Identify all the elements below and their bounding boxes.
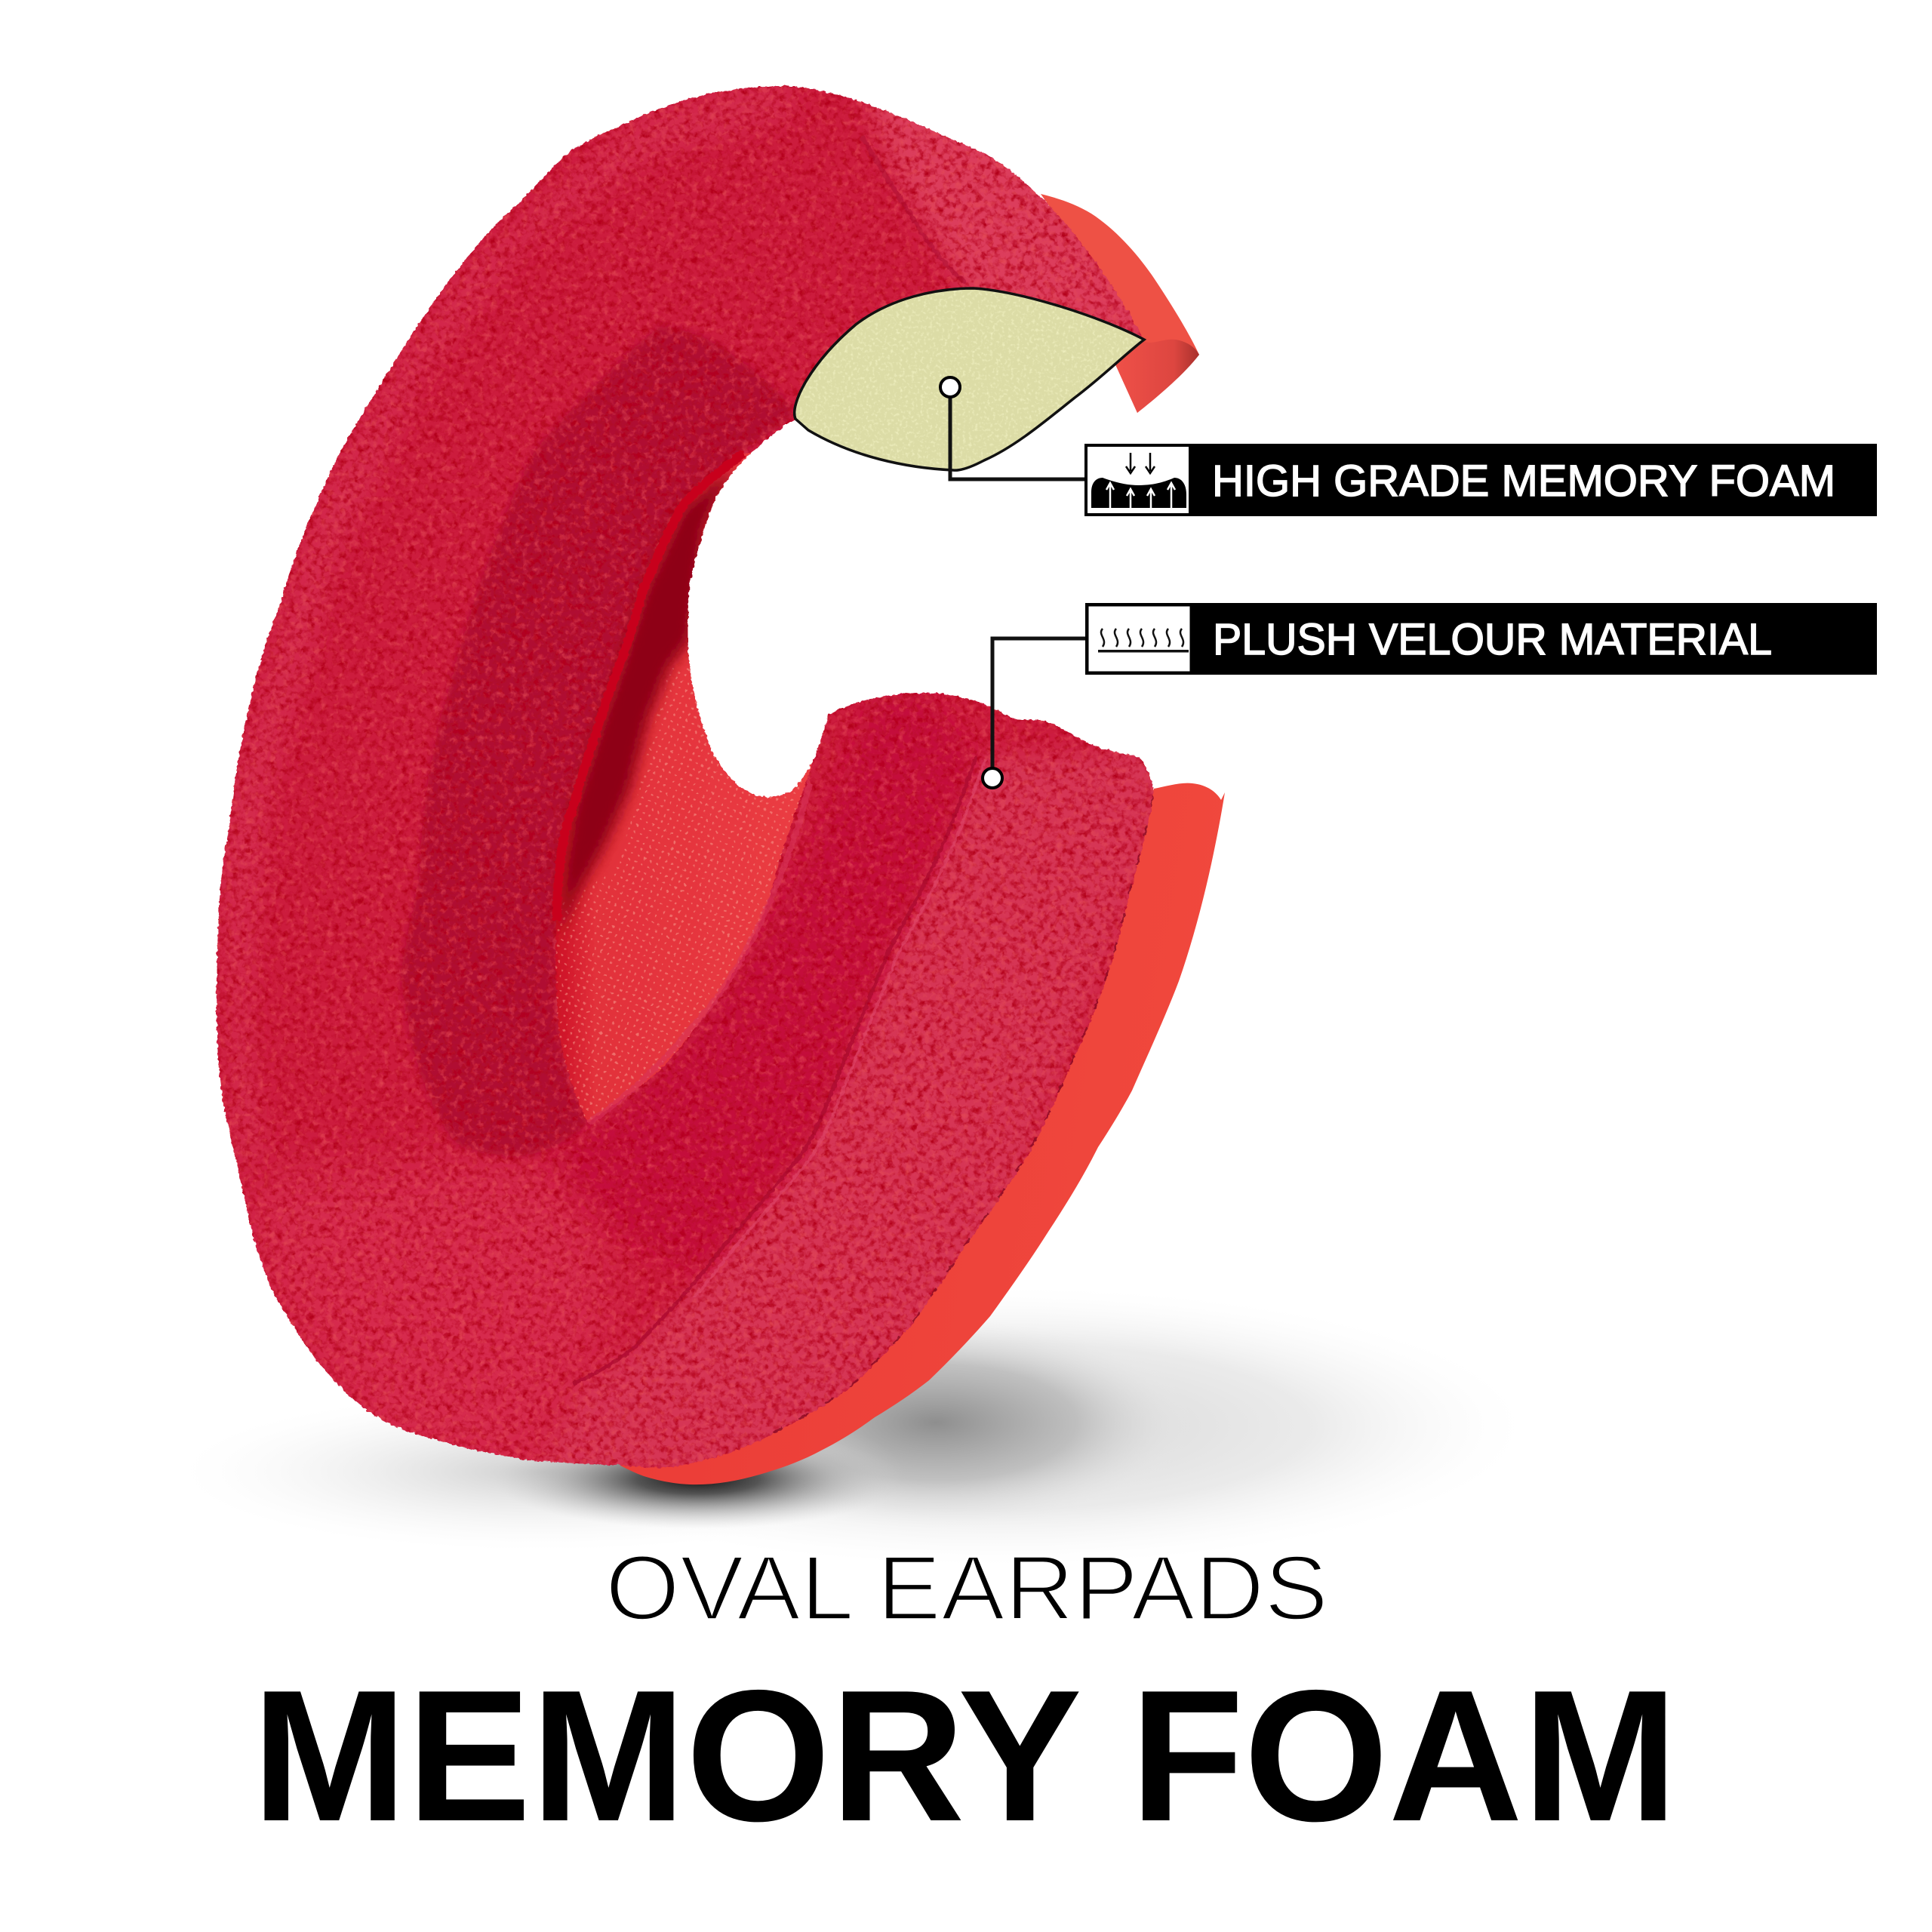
leather fold lining <box>1115 340 1199 413</box>
velour inner trough <box>401 326 792 1156</box>
upper flap lighter band <box>863 91 1155 355</box>
left outer rim shading <box>217 75 800 1177</box>
icon: velour fibres <box>1088 605 1191 672</box>
callout: velour leader <box>983 638 1085 788</box>
label text: HIGH GRADE MEMORY FOAM <box>1212 457 1835 506</box>
infographic canvas <box>216 85 1877 1822</box>
earpad <box>189 60 1225 1494</box>
back leather flap <box>1041 194 1199 413</box>
velour edge stitch <box>759 796 1154 1441</box>
velour pile texture <box>189 60 1185 1494</box>
velour body <box>189 60 1185 1494</box>
lower leather rim <box>620 783 1225 1484</box>
lower left pad shade <box>543 693 976 1275</box>
dark crescent above mesh <box>559 464 736 936</box>
banner: plush velour material <box>1085 603 1877 675</box>
velour base <box>189 60 1185 1494</box>
label text: PLUSH VELOUR MATERIAL <box>1213 615 1772 664</box>
mesh lining <box>555 453 830 1123</box>
ground shadow <box>181 1287 1524 1566</box>
memory foam cross section <box>795 288 1144 470</box>
lower right band lighter <box>528 747 1162 1479</box>
bottom lighter cheek <box>242 1163 613 1479</box>
trough bright edge <box>557 453 743 921</box>
mesh weave <box>555 666 810 1123</box>
inner rim of lower pad <box>588 783 810 1123</box>
banner: high grade memory foam <box>1084 444 1877 516</box>
icon: compressed foam <box>1086 445 1190 515</box>
subtitle: OVAL EARPADS <box>605 1537 1328 1639</box>
callout: memory foam leader <box>940 377 1084 479</box>
seams <box>574 138 985 1383</box>
title: MEMORY FOAM <box>252 1651 1678 1860</box>
